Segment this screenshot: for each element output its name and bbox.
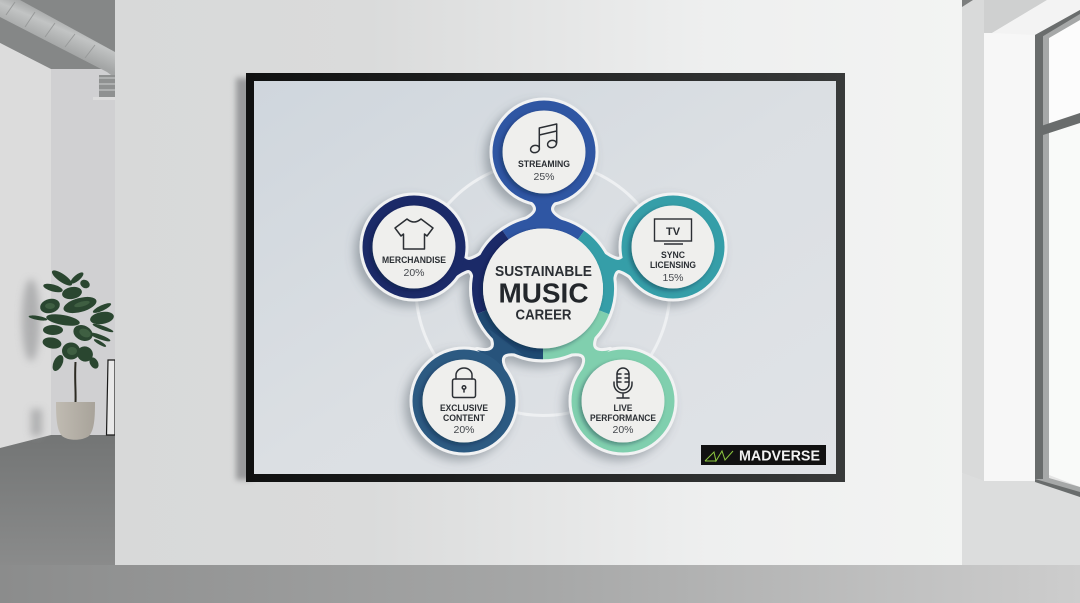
node: live performance bbox=[572, 350, 674, 452]
frame shadow bbox=[236, 78, 252, 480]
node: live performance: PERFORMANCE bbox=[590, 413, 656, 424]
plant bbox=[28, 268, 115, 440]
infographic bbox=[360, 98, 728, 456]
node: merchandise bbox=[362, 196, 466, 298]
leaning picture frame bbox=[106, 360, 115, 435]
logo: madverse: MADVERSE bbox=[739, 448, 820, 464]
white outlines and shadow bbox=[360, 98, 728, 456]
main wall bbox=[115, 0, 963, 565]
merchandise label: MERCHANDISE bbox=[382, 255, 446, 266]
poster frame bbox=[246, 73, 845, 482]
live performance value: 20% bbox=[612, 424, 634, 436]
plant pot bbox=[56, 402, 95, 440]
live performance label: LIVE bbox=[614, 403, 632, 414]
streaming label: STREAMING bbox=[518, 159, 570, 170]
logo: madverse bbox=[701, 445, 826, 465]
icon: microphone bbox=[614, 368, 632, 398]
right ceiling bbox=[984, 0, 1047, 33]
right column bbox=[962, 0, 984, 481]
icon: tv: TV bbox=[666, 226, 681, 238]
background orbit ring bbox=[416, 162, 670, 416]
icon: waveform bbox=[705, 451, 733, 461]
centre hub bbox=[483, 228, 603, 348]
window frame bbox=[1035, 10, 1080, 497]
centre ring segments bbox=[478, 223, 608, 354]
node: exclusive content bbox=[412, 350, 516, 452]
plant shadow bbox=[22, 279, 42, 436]
trunk bbox=[74, 362, 77, 402]
right wall bbox=[984, 0, 1035, 481]
node: sync licensing bbox=[622, 196, 724, 298]
left room: ceiling bbox=[0, 0, 115, 69]
node: sync licensing: LICENSING bbox=[650, 260, 696, 271]
centre title: SUSTAINABLE bbox=[495, 264, 592, 280]
sync licensing value: 15% bbox=[662, 272, 684, 284]
right floor bbox=[962, 473, 1080, 565]
lower floor bbox=[0, 565, 1080, 603]
icon: padlock bbox=[452, 368, 476, 398]
left room: floor bbox=[0, 435, 115, 565]
sync licensing label: SYNC bbox=[661, 250, 685, 261]
exclusive content value: 20% bbox=[453, 424, 475, 436]
leaf highlights bbox=[45, 300, 92, 355]
air vent bbox=[93, 75, 115, 100]
poster panel bbox=[254, 81, 836, 474]
centre hub: MUSIC bbox=[498, 278, 588, 309]
left room: back wall bbox=[51, 69, 115, 435]
left room: side wall bbox=[0, 43, 51, 448]
streaming value: 25% bbox=[533, 171, 555, 183]
icon: music notes bbox=[530, 124, 557, 154]
exclusive content label: EXCLUSIVE bbox=[440, 403, 488, 414]
node: exclusive content: CONTENT bbox=[443, 413, 485, 424]
connectors bbox=[440, 198, 647, 374]
centre hub: CAREER bbox=[516, 308, 572, 324]
air duct bbox=[0, 0, 115, 78]
icon: t-shirt bbox=[395, 219, 433, 249]
leaves bbox=[28, 268, 115, 373]
merchandise value: 20% bbox=[403, 267, 425, 279]
window panes bbox=[1049, 20, 1080, 126]
node: streaming bbox=[492, 100, 596, 204]
